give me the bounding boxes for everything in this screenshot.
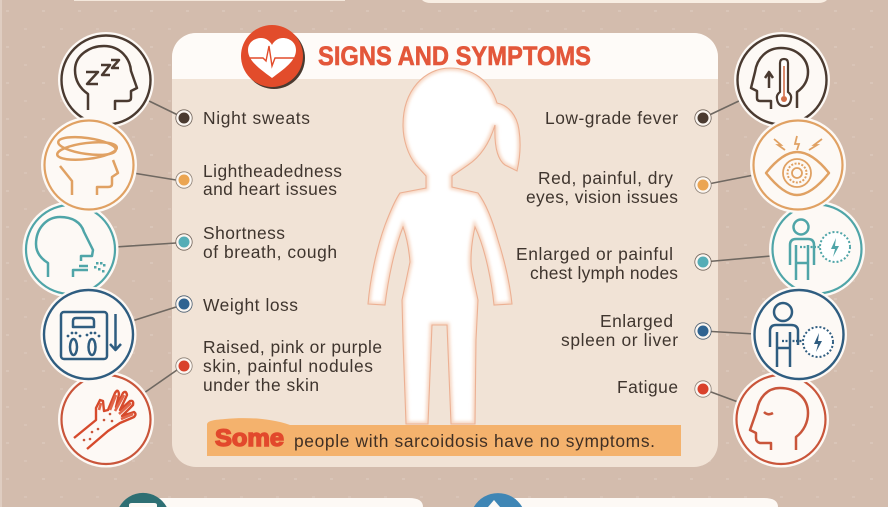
panel: bottom right cropped card <box>474 493 778 507</box>
symptom labels left: under the skin <box>203 375 319 395</box>
symptom labels right: Red, painful, dry <box>538 168 673 188</box>
icon: fatigue head <box>733 372 829 468</box>
marker dots right <box>695 110 711 397</box>
symptom labels right: chest lymph nodes <box>530 263 678 283</box>
panel: signs and symptoms <box>172 33 718 467</box>
callout: Some <box>215 425 284 452</box>
icon: dizzy head <box>41 117 137 213</box>
symptom labels right: spleen or liver <box>561 330 678 350</box>
symptom labels right: Low-grade fever <box>545 108 678 128</box>
symptom labels left: of breath, cough <box>203 242 337 262</box>
icon: sleeping head <box>58 32 154 128</box>
symptom labels left: Raised, pink or purple <box>203 337 382 357</box>
symptom labels right: Enlarged or painful <box>516 244 673 264</box>
symptom labels left <box>203 108 382 395</box>
symptom labels left: Weight loss <box>203 295 298 315</box>
symptom labels left: Shortness <box>203 223 285 243</box>
symptom labels right: Fatigue <box>617 377 678 397</box>
symptom labels right: eyes, vision issues <box>526 187 678 207</box>
callout <box>207 418 681 456</box>
icon: weight scale <box>40 286 136 382</box>
symptom labels left: Lightheadedness <box>203 161 342 181</box>
icon: breathing head <box>22 202 118 298</box>
callout: people with sarcoidosis have no symptoms. <box>294 431 655 451</box>
icon: enlarged chest lymph nodes person <box>769 201 865 297</box>
symptom labels left: and heart issues <box>203 179 337 199</box>
icon: enlarged spleen person <box>751 286 847 382</box>
heading: SIGNS AND SYMPTOMS <box>318 41 591 71</box>
symptom labels left: skin, painful nodules <box>203 356 373 376</box>
symptom labels left: Night sweats <box>203 108 310 128</box>
marker dots left <box>176 110 192 374</box>
symptom labels right: Enlarged <box>600 311 673 331</box>
icon: eye with pain sparks <box>750 117 846 213</box>
icon: hand with rash <box>58 372 154 468</box>
icon: heart badge <box>241 25 305 89</box>
symptom labels right <box>516 108 678 397</box>
connector lines <box>115 100 771 402</box>
icon: thermometer head <box>734 32 830 128</box>
body silhouette <box>368 68 520 424</box>
panel: top right cropped card <box>422 0 827 3</box>
panel: top left cropped card <box>74 0 345 1</box>
panel: bottom left cropped card <box>119 493 423 507</box>
